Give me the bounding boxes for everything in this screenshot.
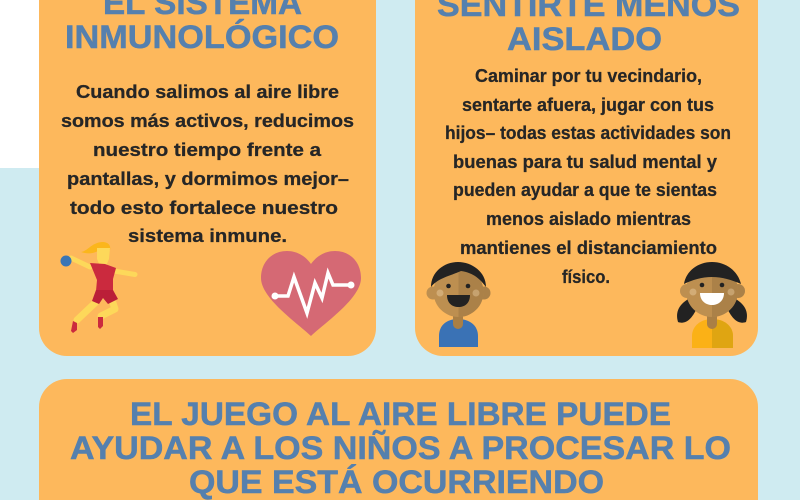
text block: aislado body: sentarte afuera, jugar con tus bbox=[462, 95, 714, 115]
text block: inmunológico body: somos más activos, reducimos bbox=[61, 111, 354, 131]
panel: sistema inmunológico bbox=[39, 0, 376, 356]
icon: girl face bbox=[677, 262, 747, 348]
text block: inmunológico body bbox=[61, 82, 354, 246]
icon: heart with pulse bbox=[261, 251, 361, 336]
text block: inmunológico body: nuestro tiempo frente a bbox=[93, 140, 322, 160]
text block: aislado body: físico. bbox=[562, 267, 610, 287]
text block: aislado body: menos aislado mientras bbox=[486, 209, 691, 229]
text block: inmunológico body: Cuando salimos al aire libre bbox=[76, 82, 339, 102]
panel: sentirte menos aislado bbox=[415, 0, 758, 356]
icon: player throwing ball bbox=[60, 242, 135, 333]
heading: el juego al aire libre: QUE ESTÁ OCURRIENDO bbox=[189, 464, 604, 500]
heading: el juego al aire libre: AYUDAR A LOS NIÑOS A PROCESAR LO bbox=[70, 430, 731, 466]
text block: inmunológico body: sistema inmune. bbox=[128, 226, 287, 246]
heading: el sistema inmunológico: INMUNOLÓGICO bbox=[65, 19, 339, 55]
icon: boy face bbox=[426, 262, 490, 347]
text block: inmunológico body: pantallas, y dormimos mejor– bbox=[67, 169, 349, 189]
text block: aislado body: hijos– todas estas actividades son bbox=[445, 123, 731, 143]
heading: el juego al aire libre bbox=[70, 396, 731, 500]
heading: el sistema inmunológico bbox=[65, 0, 339, 55]
text block: aislado body bbox=[445, 66, 731, 287]
panel: juego al aire libre bbox=[39, 379, 758, 500]
text block: aislado body: buenas para tu salud mental y bbox=[453, 152, 717, 172]
heading: sentirte menos aislado: AISLADO bbox=[507, 21, 662, 57]
text block: inmunológico body: todo esto fortalece nuestro bbox=[70, 198, 338, 218]
text block: aislado body: mantienes el distanciamiento bbox=[460, 238, 717, 258]
text block: aislado body: Caminar por tu vecindario, bbox=[475, 66, 702, 86]
heading: sentirte menos aislado bbox=[437, 0, 740, 57]
heading: el juego al aire libre: EL JUEGO AL AIRE LIBRE PUEDE bbox=[130, 396, 671, 432]
text block: aislado body: pueden ayudar a que te sientas bbox=[453, 180, 717, 200]
